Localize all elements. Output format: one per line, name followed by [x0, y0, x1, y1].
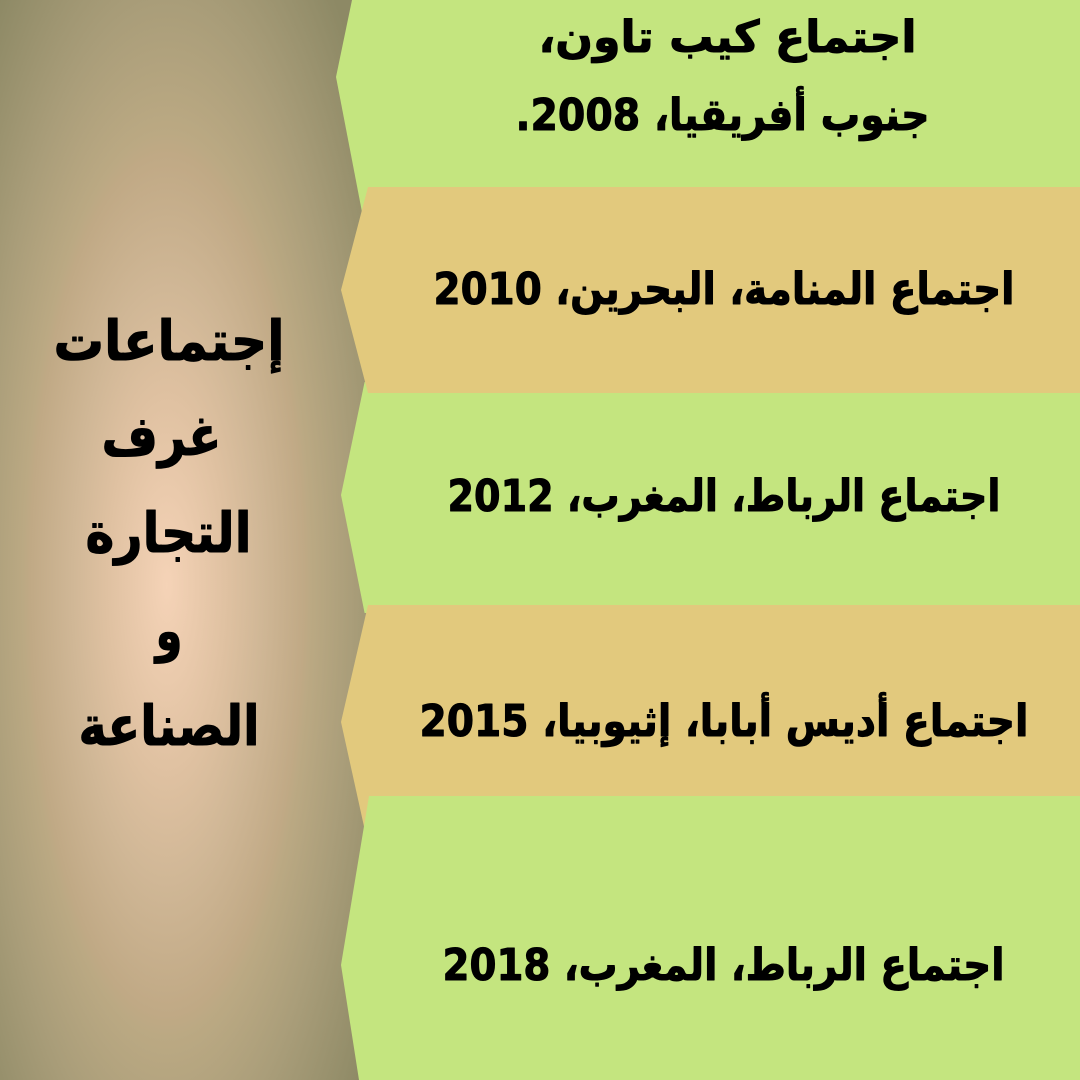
- title: chambers of commerce meetings: و: [153, 599, 182, 664]
- title: chambers of commerce meetings: غرف: [102, 404, 222, 468]
- title: chambers of commerce meetings: [54, 309, 284, 758]
- band 2: tan Manama: [341, 187, 1080, 393]
- band 3: green Rabat 2012: [341, 382, 1080, 613]
- band 5: green Rabat 2018: [341, 796, 1080, 1080]
- text: Addis Ababa meeting: اجتماع أديس أبابا، إثيوبيا، 2015: [419, 692, 1028, 747]
- text: Cape Town meeting: اجتماع كيب تاون،: [538, 12, 916, 63]
- text: Manama meeting: اجتماع المنامة، البحرين، 2010: [434, 264, 1015, 315]
- title: chambers of commerce meetings: التجارة: [86, 501, 252, 565]
- title: chambers of commerce meetings: الصناعة: [78, 694, 260, 758]
- band 4: tan Addis Ababa: [341, 605, 1080, 840]
- band 1: green Cape Town: [336, 0, 1080, 212]
- text: Cape Town meeting: [516, 12, 930, 141]
- title: chambers of commerce meetings: إجتماعات: [54, 309, 284, 374]
- text: Rabat 2012 meeting: اجتماع الرباط، المغرب، 2012: [448, 471, 1000, 522]
- text: Rabat 2018 meeting: اجتماع الرباط، المغرب، 2018: [442, 940, 1004, 991]
- text: Cape Town meeting: جنوب أفريقيا، 2008.: [516, 86, 930, 141]
